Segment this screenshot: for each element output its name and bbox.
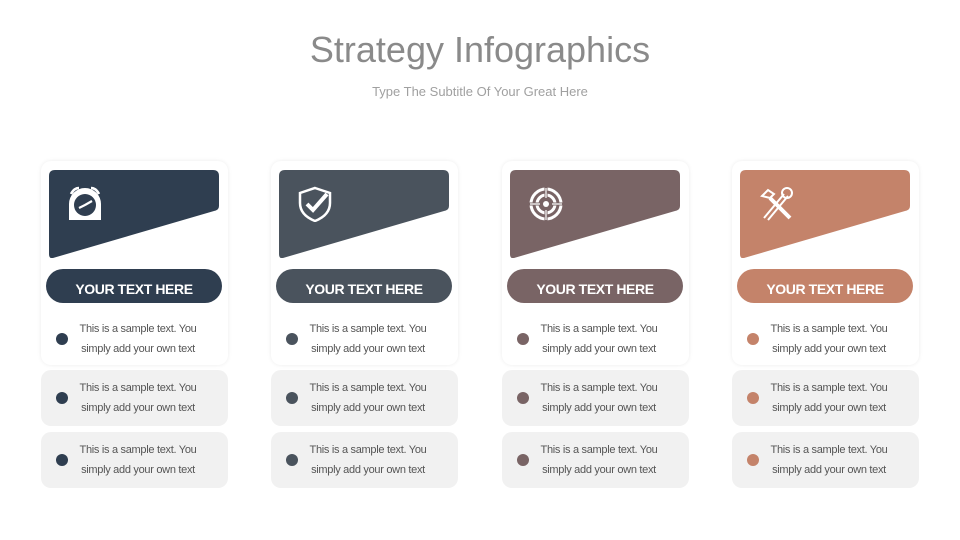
item 3 bbox=[732, 432, 919, 488]
header shape bbox=[279, 170, 449, 258]
icon: tools bbox=[760, 187, 793, 221]
header shape bbox=[740, 170, 910, 258]
item 3: This is a sample text. You simply add your own text bbox=[771, 444, 887, 476]
item 1: This is a sample text. You simply add your own text bbox=[541, 323, 657, 355]
item 1: This is a sample text. You simply add your own text bbox=[80, 323, 196, 355]
pill heading bbox=[46, 269, 222, 303]
item 2: This is a sample text. You simply add your own text bbox=[310, 382, 426, 414]
item 2 bbox=[41, 370, 228, 426]
card bbox=[502, 161, 689, 365]
item 1: This is a sample text. You simply add your own text bbox=[771, 323, 887, 355]
icon: shield check bbox=[298, 186, 332, 222]
item 3 bbox=[41, 432, 228, 488]
card bbox=[271, 161, 458, 365]
item 2: This is a sample text. You simply add your own text bbox=[771, 382, 887, 414]
item 3 bbox=[271, 432, 458, 488]
panel: column 2 bbox=[270, 160, 458, 488]
item 3 bbox=[502, 432, 689, 488]
panel: column 1 bbox=[40, 160, 228, 488]
pill heading bbox=[507, 269, 683, 303]
item 2 bbox=[732, 370, 919, 426]
icon: target bbox=[530, 188, 562, 220]
item 3: This is a sample text. You simply add your own text bbox=[541, 444, 657, 476]
icon: alarm clock bbox=[69, 186, 101, 220]
pill heading bbox=[737, 269, 913, 303]
item 3: This is a sample text. You simply add your own text bbox=[80, 444, 196, 476]
title: Strategy Infographics bbox=[310, 29, 650, 70]
header shape bbox=[49, 170, 219, 258]
item 2 bbox=[271, 370, 458, 426]
item 2 bbox=[502, 370, 689, 426]
card bbox=[41, 161, 228, 365]
item 2: This is a sample text. You simply add your own text bbox=[80, 382, 196, 414]
pill heading: YOUR TEXT HERE bbox=[766, 281, 884, 297]
pill heading bbox=[276, 269, 452, 303]
pill heading: YOUR TEXT HERE bbox=[305, 281, 423, 297]
item 1: This is a sample text. You simply add your own text bbox=[310, 323, 426, 355]
pill heading: YOUR TEXT HERE bbox=[75, 281, 193, 297]
item 3: This is a sample text. You simply add your own text bbox=[310, 444, 426, 476]
item 2: This is a sample text. You simply add your own text bbox=[541, 382, 657, 414]
card bbox=[732, 161, 919, 365]
header shape bbox=[510, 170, 680, 258]
panel: column 4 bbox=[732, 160, 920, 488]
subtitle: Type The Subtitle Of Your Great Here bbox=[372, 84, 588, 99]
pill heading: YOUR TEXT HERE bbox=[536, 281, 654, 297]
panel: column 3 bbox=[502, 160, 690, 488]
